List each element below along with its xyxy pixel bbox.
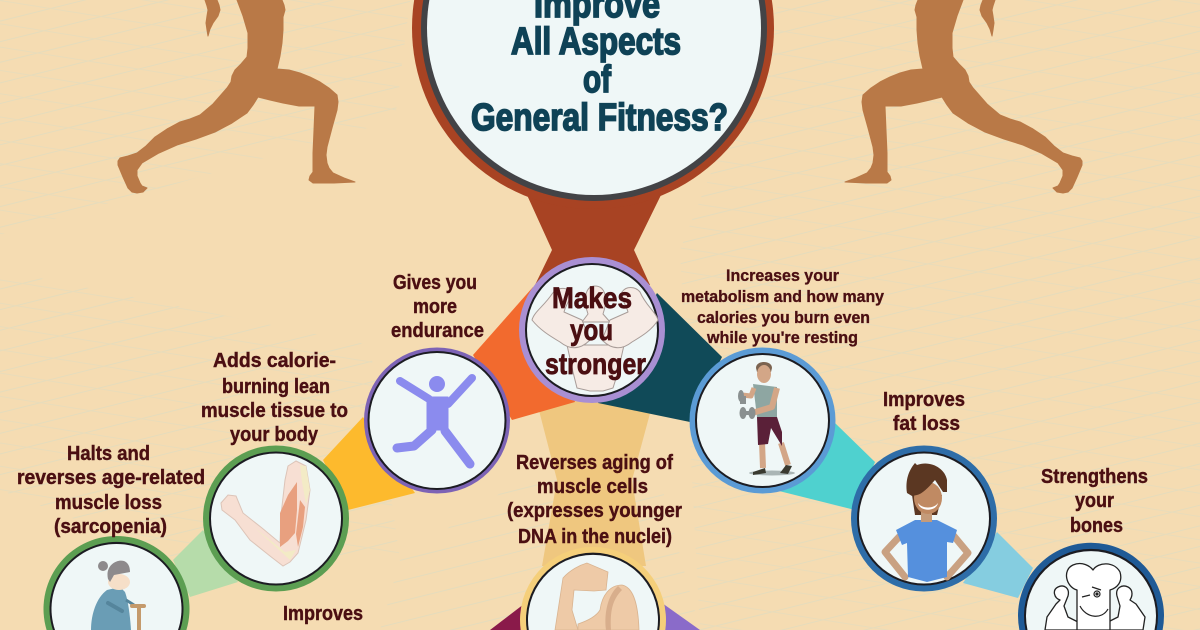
circle: younger muscle cells [520,547,666,630]
center label: Makes [552,282,632,315]
connector: dark teal wedge [598,293,722,422]
icon: flexed biceps [555,563,639,630]
label: sarcopenia [17,442,205,538]
label: lean muscle tissue: Adds calorie- [213,349,336,372]
circle: muscle tissue [203,446,349,592]
connector: crimson wedge [490,604,535,630]
label: strengthens your bones: your [1075,489,1114,512]
connector: violet wedge [655,603,700,630]
center label: stronger [545,348,646,381]
label: metabolism: while you're resting [706,328,858,347]
circle: bones [1018,543,1164,630]
label: reverses aging: DNA in the nuclei) [518,525,672,548]
label: strengthens your bones [1041,465,1148,537]
connector: sand hourglass wedge [535,395,655,566]
label: reverses aging [507,451,682,548]
label: sarcopenia: muscle loss [55,491,162,514]
label: strengthens your bones: Strengthens [1041,465,1148,488]
connector: light green wedge [173,530,238,597]
connector: light blue wedge [963,532,1033,598]
label: improves fat loss [883,388,965,435]
circle: endurance [364,348,510,494]
icon: elderly woman with cane [91,561,146,630]
label: metabolism: calories you burn even [697,308,870,327]
label: strengthens your bones: bones [1070,514,1123,537]
icon: arm anatomy [221,461,310,566]
icon: jumping figure [397,376,472,464]
circle: fat loss [851,446,997,592]
label: reverses aging: Reverses aging of [516,451,673,474]
label: gives you more endurance: endurance [391,319,484,342]
title text: of [583,59,611,101]
label: lean muscle tissue: burning lean [222,375,330,398]
icon: woman with dumbbells [738,362,795,476]
label: sarcopenia: (sarcopenia) [54,515,167,538]
center label: you [570,314,613,347]
label: sarcopenia: reverses age-related [17,466,205,489]
label: improves fat loss: fat loss [893,412,960,435]
label: reverses aging: muscle cells [537,475,648,498]
label: metabolism: metabolism and how many [681,287,885,306]
title circle [412,0,774,209]
title text: All Aspects [511,21,681,63]
label: metabolism: Increases your [726,266,839,285]
icon: muscular torso [532,286,658,391]
label: lean muscle tissue [201,349,348,446]
label: metabolism [681,266,885,347]
connector: cyan wedge [775,423,875,510]
label: gives you more endurance: Gives you [393,271,477,294]
right lunging figure [845,0,1082,193]
circle: metabolism [690,348,836,494]
label: gives you more endurance [391,271,484,342]
left lunging figure [118,0,355,193]
label: improves fat loss: Improves [883,388,965,411]
label: gives you more endurance: more [413,295,457,318]
connector: yellow wedge [323,417,415,510]
label: improves: Improves [283,602,363,625]
label: reverses aging: (expresses younger [507,499,682,522]
circle: sarcopenia [43,536,189,630]
center label [545,282,646,381]
center circle: makes you stronger [519,257,665,403]
label: sarcopenia: Halts and [67,442,150,465]
title text: General Fitness? [471,97,728,139]
bone face [1080,587,1108,616]
label: lean muscle tissue: your body [230,423,319,446]
icon: flexing bone [1045,564,1145,630]
icon: smiling woman [885,463,968,582]
connector: orange wedge [473,287,575,420]
connector: hourglass stem [527,195,661,285]
title text [471,0,728,139]
label: lean muscle tissue: muscle tissue to [201,399,348,422]
